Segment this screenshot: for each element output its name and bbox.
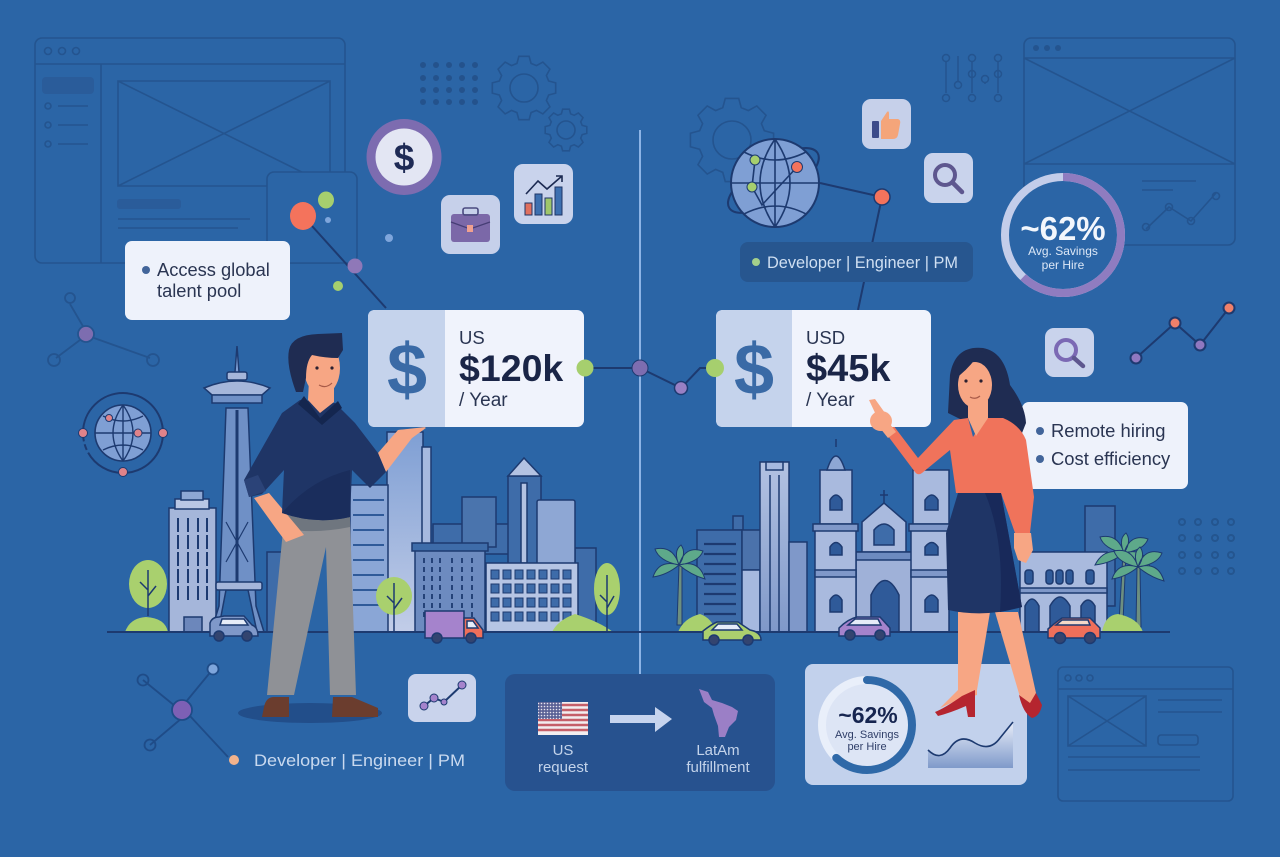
- callout: remote hiring: Cost efficiency: [1051, 448, 1171, 469]
- salary card: US: / Year: [459, 390, 508, 411]
- icon: dollar coin: $: [394, 137, 415, 178]
- network: left lower: [138, 664, 228, 757]
- icon: dollar coin: [366, 119, 442, 195]
- bottom chart tile: [408, 674, 476, 722]
- wireframe: left browser window: [35, 38, 345, 263]
- panel: US request to LatAm fulfillment: [505, 674, 775, 791]
- icon: thumbs up tile: [862, 99, 911, 149]
- icon: search tile lower: [1045, 328, 1094, 377]
- icon: sliders: [942, 54, 1002, 102]
- icon: gear right: [690, 98, 774, 182]
- icon: space needle: [204, 346, 270, 632]
- callout: access global talent pool: talent pool: [157, 280, 241, 301]
- right skyline: [697, 439, 1115, 632]
- palms: [653, 533, 1164, 627]
- salary card: US: $120k: [459, 347, 563, 389]
- salary card: US: $: [387, 330, 427, 410]
- person: man: [238, 333, 426, 723]
- salary card: LatAm: USD: [806, 327, 845, 348]
- ground line: [107, 631, 1170, 633]
- wireframe: bottom right window: [1058, 667, 1233, 801]
- callout: access global talent pool: [125, 241, 290, 320]
- salary card: LatAm: $: [734, 330, 774, 410]
- savings ring: top right: per Hire: [1042, 258, 1085, 272]
- panel: US request to LatAm fulfillment: LatAm: [696, 742, 740, 759]
- icon: search tile: [924, 153, 973, 203]
- salary card: LatAm: $45k: [806, 348, 891, 390]
- salary card: LatAm: / Year: [806, 390, 855, 411]
- sparkline: [928, 722, 1013, 768]
- callout: access global talent pool: Access global: [157, 259, 270, 280]
- panel: US request to LatAm fulfillment: request: [538, 759, 589, 776]
- wireframe: right browser window: [1024, 38, 1235, 245]
- panel: US request to LatAm fulfillment: US: [553, 742, 573, 759]
- label: roles bottom: Developer | Engineer | PM: [254, 751, 465, 770]
- icon: Latin America map: [699, 689, 738, 737]
- decorative dot grid: top left: [420, 62, 478, 105]
- left skyline: [169, 432, 596, 632]
- label pill: roles top: Developer | Engineer | PM: [767, 253, 958, 272]
- panel: savings bottom: per Hire: [847, 741, 887, 753]
- icon: right globe with links: [719, 136, 890, 310]
- trees and bushes: [125, 560, 1143, 632]
- center divider line: [639, 130, 641, 674]
- icon: gears left: [492, 56, 587, 151]
- panel: savings bottom: Avg. Savings: [835, 729, 899, 741]
- man hand on card: [392, 427, 426, 442]
- savings ring: top right: ~62%: [1020, 210, 1106, 247]
- salary card: LatAm: [716, 310, 931, 427]
- icon: growth chart tile: [514, 164, 573, 224]
- decorative dot grid: right: [1179, 519, 1234, 574]
- savings ring: top right: [1005, 177, 1121, 293]
- connector: left nodes to salary card: [290, 192, 393, 308]
- label pill: roles top: [740, 242, 973, 282]
- network: left upper: [48, 293, 159, 366]
- wireframe: small left card: [267, 172, 357, 263]
- callout: remote hiring: [1022, 402, 1188, 489]
- callout: remote hiring: Remote hiring: [1051, 420, 1165, 441]
- panel: savings bottom: [805, 664, 1027, 785]
- savings ring: top right: Avg. Savings: [1028, 244, 1098, 258]
- pointing hand: [869, 399, 896, 438]
- arrow: [610, 707, 672, 732]
- vehicles: [210, 611, 1100, 645]
- salary card: US: US: [459, 327, 485, 348]
- salary card: US: [368, 310, 584, 427]
- network: right zig-zag: [1130, 302, 1234, 364]
- icon: US flag: [538, 702, 588, 735]
- panel: savings bottom: ~62%: [838, 702, 898, 728]
- connector: between salary cards: [576, 359, 724, 394]
- icon: left globe: [78, 393, 168, 476]
- person: woman: [885, 348, 1042, 718]
- panel: US request to LatAm fulfillment: fulfillment: [686, 759, 751, 776]
- icon: briefcase tile: [441, 195, 500, 254]
